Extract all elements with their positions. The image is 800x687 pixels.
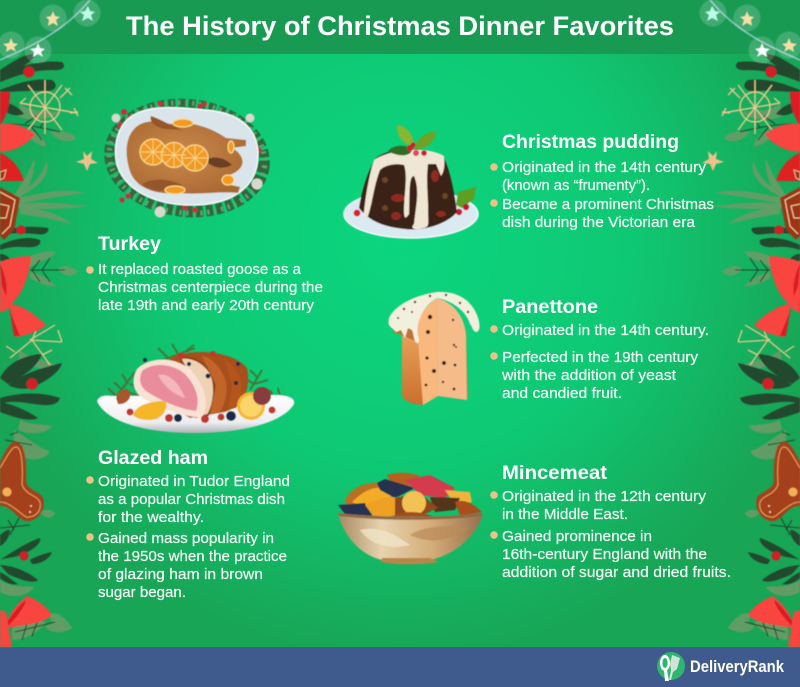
lemons [133,401,166,420]
title: The History of Christmas Dinner Favorites [126,11,674,41]
turkey text: It replaced roasted goose as a [98,262,302,278]
fig [253,387,271,405]
right holiday decoration [700,0,800,647]
mincemeat text: Originated in the 12th century [502,489,707,505]
glazed ham text: Gained mass popularity in [98,531,274,547]
light string [0,0,90,60]
christmas pudding illustration [344,125,478,238]
header band [0,0,800,54]
DeliveryRank logo [657,652,784,681]
mincemeat text: Gained prominence in [502,529,652,545]
footer band [0,647,800,687]
christmas pudding text [490,160,714,231]
glazed ham text [86,474,290,601]
turkey text: Christmas centerpiece during the [98,280,323,296]
side leaves [456,187,476,208]
snowflake lower [6,322,62,365]
glazed ham heading: Glazed ham [98,448,208,469]
plate [344,190,478,238]
panettone text: and candied fruit. [502,386,622,402]
christmas pudding heading: Christmas pudding [502,132,679,153]
bird [127,122,246,194]
red bow [0,256,46,337]
glazed ham text: of glazing ham in brown [98,567,263,583]
turkey heading: Turkey [98,234,161,255]
orange slices [140,119,234,194]
mincemeat text [490,489,731,581]
logo icon [657,652,685,681]
panettone text [490,323,709,402]
herbs [108,344,285,402]
panettone heading: Panettone [502,297,598,318]
christmas pudding text: Originated in the 14th century [502,160,707,176]
poinsettia petals [0,92,35,181]
turkey text: late 19th and early 20th century [98,298,315,314]
bowl [338,513,483,560]
panettone text: Originated in the 14th century. [502,323,709,339]
string stars [3,6,95,57]
tan star [76,151,98,171]
olive background foliage [0,104,88,640]
panettone illustration [388,292,480,405]
glazed ham text: for the wealthy. [98,510,204,526]
turkey illustration [104,95,270,221]
thin sprigs [0,116,65,640]
glazed ham text: Originated in Tudor England [98,474,290,490]
icing [363,150,444,229]
dried fruit [345,483,390,510]
plate [97,395,294,433]
ham slices [160,352,248,418]
cut faces [417,298,438,405]
platter [115,108,258,205]
berries [126,351,276,423]
turkey text [86,262,323,314]
logo wordmark: DeliveryRank [690,657,784,676]
glazed ham text: as a popular Christmas dish [98,492,285,508]
gingerbread man [0,442,44,521]
icing top [388,292,480,343]
glazed ham text: the 1950s when the practice [98,549,287,565]
lower red bow [0,596,52,647]
mincemeat text: 16th-century England with the [502,547,707,563]
wreath [104,95,270,221]
snowflake upper [20,80,78,134]
panettone text: Perfected in the 19th century [502,350,699,366]
glazed ham illustration [97,344,294,433]
left holiday decoration [0,0,100,647]
mincemeat text: addition of sugar and dried fruits. [502,565,731,581]
christmas pudding text: Became a prominent Christmas [502,197,714,213]
mincemeat illustration [338,473,483,564]
gingerbread house [0,170,20,240]
red berries [16,66,38,560]
glazed ham text: sugar began. [98,585,186,601]
mincemeat heading: Mincemeat [502,463,608,484]
christmas pudding text: dish during the Victorian era [502,215,696,231]
pudding body [359,149,457,229]
crust side [402,335,424,405]
christmas pudding text: (known as “frumenty”). [502,178,650,194]
panettone text: with the addition of yeast [501,368,676,384]
mincemeat text: in the Middle East. [502,507,628,523]
holly [397,125,414,146]
star halos [0,0,100,64]
dark holly leaves, upper [0,54,64,585]
ham face [134,359,206,418]
